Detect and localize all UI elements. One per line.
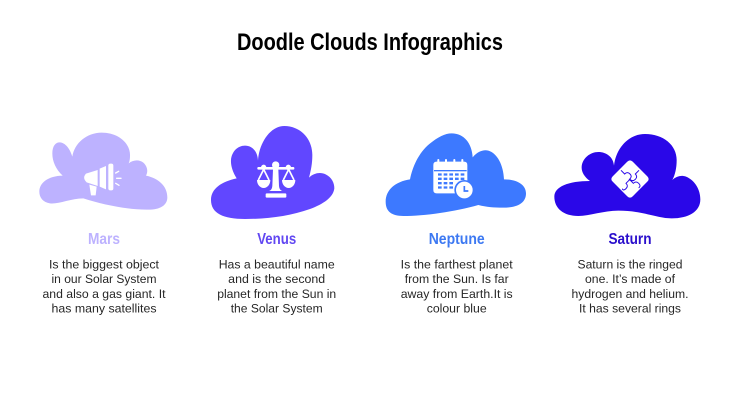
icon: scales	[257, 161, 295, 198]
heading: Venus: Venus	[257, 231, 296, 248]
text: Saturn description: Saturn is the ringed	[578, 258, 683, 272]
text: Mars description: has many satellites	[52, 302, 156, 316]
text: Venus description: and is the second	[228, 272, 325, 286]
panel: Neptune	[386, 133, 526, 316]
heading: Saturn: Saturn	[608, 231, 652, 248]
cloud: Saturn	[554, 134, 700, 218]
text: Neptune description: Is the farthest planet	[401, 258, 513, 272]
text: Saturn description	[572, 258, 688, 316]
text: Venus description: the Solar System	[231, 302, 323, 316]
text: Neptune description	[401, 258, 513, 316]
panel: Mars	[39, 133, 167, 316]
text: Mars description: in our Solar System	[52, 272, 156, 286]
text: Saturn description: It has several rings	[579, 302, 681, 316]
icon: megaphone	[84, 164, 121, 195]
text: Saturn description: hydrogen and helium.	[572, 287, 688, 301]
icon: puzzle	[611, 160, 649, 198]
text: Mars description	[42, 258, 166, 316]
text: Saturn description: one. It’s made of	[585, 272, 676, 286]
text: Venus description: Has a beautiful name	[219, 258, 335, 272]
cloud: Mars	[39, 133, 167, 210]
text: Neptune description: colour blue	[427, 302, 487, 316]
cloud: Venus	[211, 126, 334, 219]
heading: Mars: Mars	[88, 231, 120, 248]
heading: Neptune: Neptune	[429, 231, 485, 248]
text: Venus description: planet from the Sun in	[217, 287, 336, 301]
text: Venus description	[217, 258, 336, 316]
text: Neptune description: from the Sun. Is far	[405, 272, 509, 286]
cloud: Neptune	[386, 133, 526, 216]
panel: Saturn	[554, 134, 700, 316]
icon: calendar with clock	[433, 160, 474, 200]
title: Doodle Clouds Infographics	[237, 29, 503, 56]
text: Mars description: and also a gas giant. It	[42, 287, 166, 301]
text: Mars description: Is the biggest object	[49, 258, 160, 272]
text: Neptune description: away from Earth.It is	[401, 287, 513, 301]
panel: Venus	[211, 126, 336, 315]
